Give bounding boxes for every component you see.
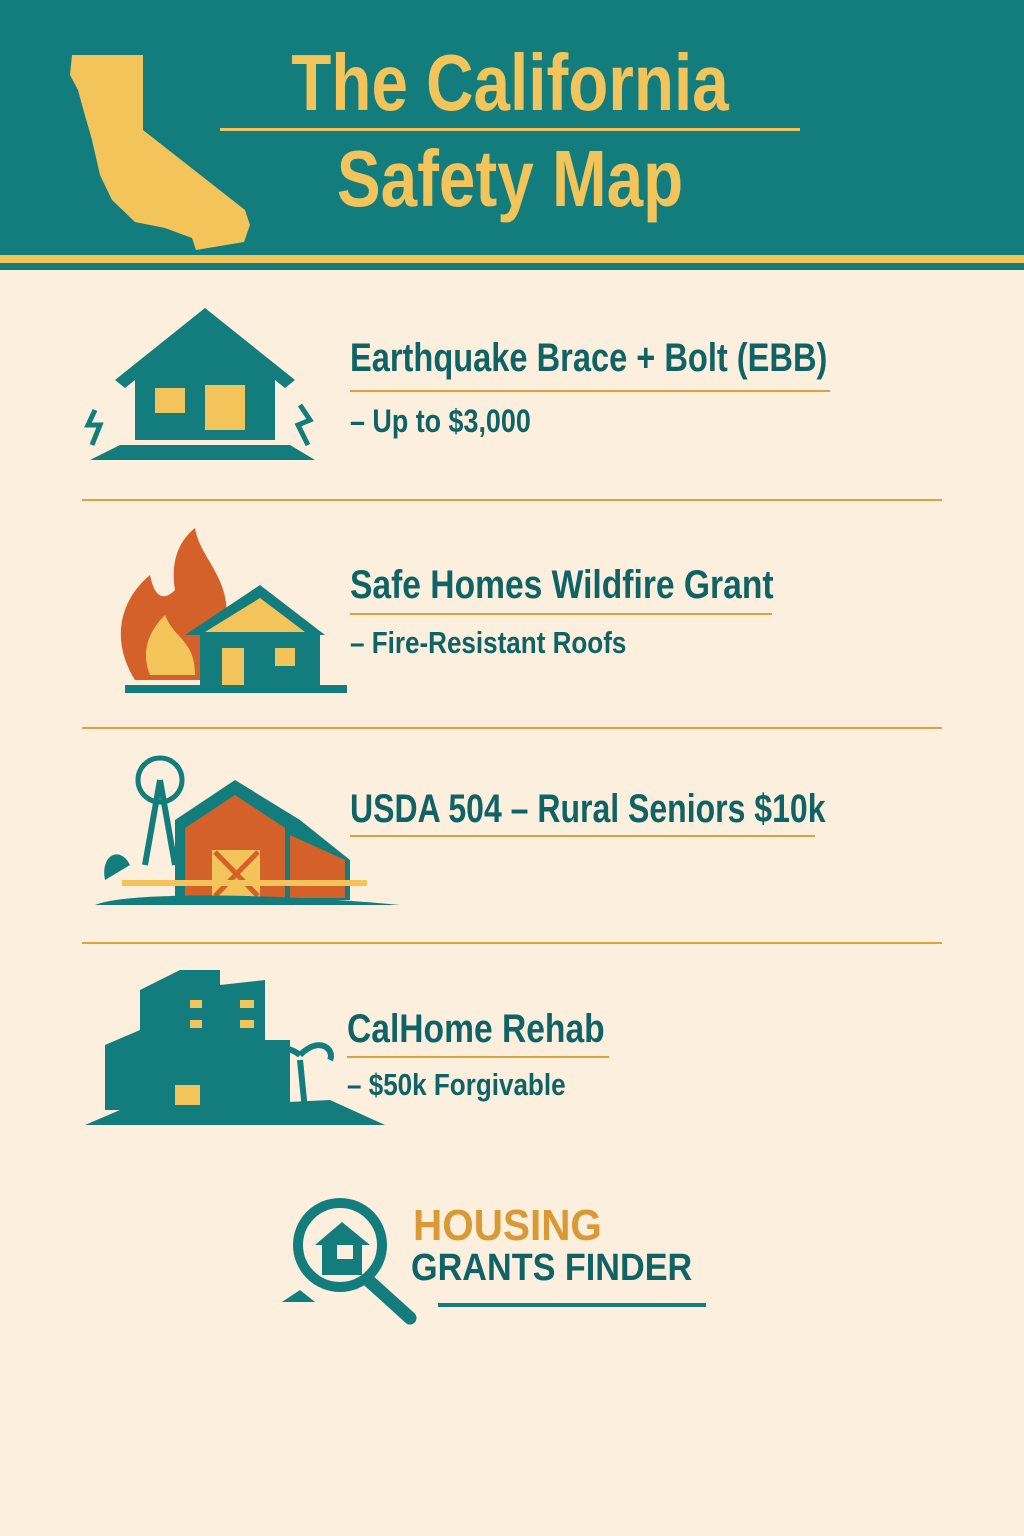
title: [220, 38, 800, 223]
icon: magnifier house: [282, 1198, 416, 1324]
heading: Earthquake Brace + Bolt (EBB): [350, 336, 827, 380]
section: CalHome: [85, 970, 609, 1125]
logo: housing grants finder: [282, 1198, 706, 1324]
header banner: [0, 0, 1024, 270]
text: – Up to $3,000: [350, 403, 531, 439]
section: USDA: [95, 756, 826, 905]
heading: USDA 504 – Rural Seniors $10k: [350, 787, 825, 831]
brand text: HOUSING: [413, 1201, 602, 1250]
logo: housing grants finder: GRANTS FINDER: [411, 1247, 692, 1289]
text: – $50k Forgivable: [347, 1067, 566, 1102]
section: wildfire: [120, 528, 774, 693]
title: Safety Map: [337, 134, 683, 223]
title: The California: [291, 38, 729, 127]
icon: city: [85, 970, 385, 1125]
icon: california map: [70, 55, 250, 250]
icon: fire house: [120, 528, 347, 693]
heading: CalHome Rehab: [347, 1007, 605, 1051]
heading: Safe Homes Wildfire Grant: [350, 563, 774, 607]
icon: barn: [95, 756, 400, 905]
section: earthquake: [84, 308, 830, 460]
icon: shaking house: [84, 308, 315, 460]
text: – Fire-Resistant Roofs: [350, 625, 626, 660]
